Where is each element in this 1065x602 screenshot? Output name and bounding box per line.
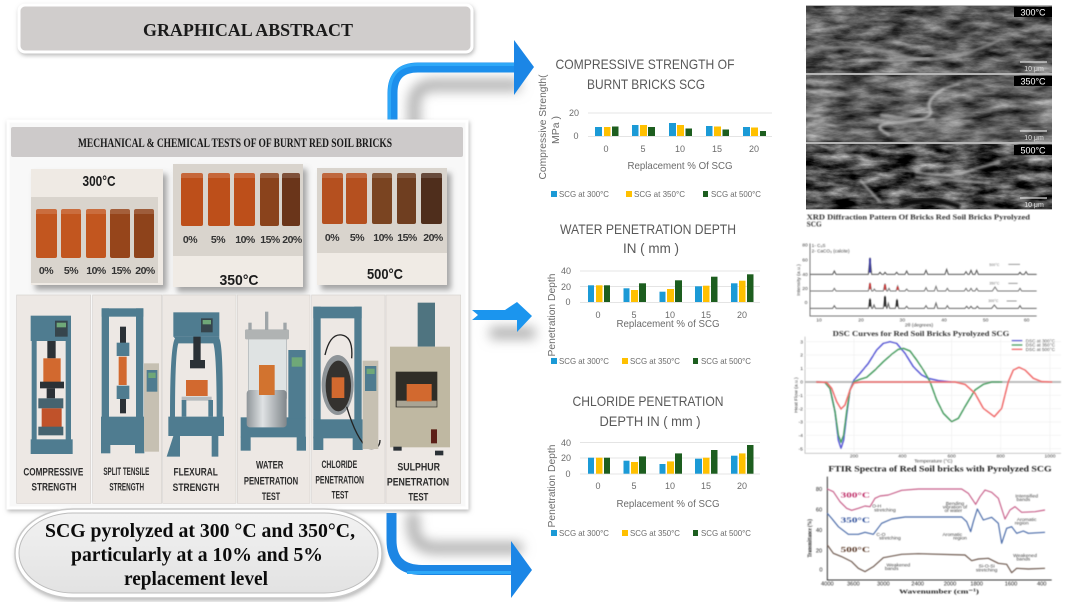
test: water penetration: PENETRATION (244, 476, 298, 488)
DSC legend (1012, 338, 1056, 352)
FTIR annotations: Weakened (886, 563, 910, 569)
chart: DSC curves (794, 329, 1061, 465)
test: water penetration (237, 295, 310, 503)
chart: chloride penetration depth: 10 (665, 481, 675, 491)
FTIR annotations: stretching (976, 568, 998, 574)
XRD traces (810, 258, 1037, 308)
DSC axis labels: 200 (850, 454, 858, 460)
DSC axis labels: 400 (898, 454, 907, 460)
FTIR axis labels: 400 (1037, 581, 1046, 587)
chart: chloride penetration depth: 40 (561, 438, 571, 448)
conclusion pill (15, 509, 382, 598)
DSC axis labels: 800 (997, 454, 1005, 460)
DSC heading: DSC Curves for Red Soil Bricks Pyrolyzed SCG (833, 329, 1009, 338)
legend: SCG at 350°C (630, 528, 680, 538)
XRD axis labels: 0 (805, 300, 808, 306)
FTIR annotations: bands (1017, 556, 1031, 562)
chart: water penetration depth: 10 (665, 310, 675, 320)
test: chloride penetration: PENETRATION (315, 475, 364, 487)
chart: compressive strength: 0 (603, 144, 609, 154)
XRD axis labels: 80 (802, 243, 808, 249)
legend: SCG at 300°C (559, 356, 609, 366)
SEM panel: 500 C (806, 144, 1052, 209)
FTIR axis labels: 3600 (847, 581, 860, 587)
test: chloride penetration: TEST (332, 490, 348, 502)
chart title: BURNT BRICKS SCG (587, 76, 705, 92)
test: split tensile strength: STRENGTH (109, 481, 144, 493)
chart title (556, 56, 734, 92)
test: compressive strength: STRENGTH (31, 481, 77, 493)
brick card: 350 C (173, 164, 303, 289)
FTIR annotations: Aromatic (1017, 517, 1037, 523)
arrow: to compressive strength chart (390, 40, 534, 124)
test: compressive strength (17, 295, 91, 503)
arrow shadows (413, 85, 535, 548)
brick card: 300 C: 0% (39, 265, 54, 277)
FTIR axis labels: 60 (816, 507, 822, 513)
chart title: COMPRESSIVE STRENGTH OF (556, 56, 734, 72)
test: split tensile strength: SPLIT TENSILE (103, 466, 149, 478)
brick card: 300 C: 10% (86, 265, 107, 277)
FTIR axis labels: Wavenumber (cm⁻¹) (899, 589, 979, 596)
legend: SCG at 500°C (701, 356, 751, 366)
chart: compressive strength: 0 (573, 131, 579, 141)
chart: chloride penetration depth: 0 (595, 481, 601, 491)
panel: mechanical and chemical tests (8, 121, 467, 508)
chart: water penetration depth: 0 (565, 297, 571, 307)
chart: compressive strength: Compressive Strength( (537, 74, 549, 180)
chart: water penetration depth (546, 221, 760, 366)
FTIR annotations: region (1015, 520, 1029, 526)
FTIR axis labels: Transmittance (%) (807, 519, 814, 557)
XRD axis labels: 1- C₃S (812, 243, 825, 248)
legend: SCG at 350°C (630, 356, 680, 366)
SEM panel: 500 C: 10 μm (1024, 202, 1044, 209)
brick card: 300 C: 300°C (82, 173, 116, 190)
DSC axis labels: -4 (798, 433, 803, 439)
FTIR axis labels: 2000 (944, 581, 956, 587)
bars (588, 445, 754, 474)
test: chloride penetration: CHLORIDE (321, 459, 357, 471)
XRD axis labels: 60 (1024, 317, 1030, 323)
XRD axis labels: 300°C (988, 299, 999, 303)
bars (588, 274, 754, 302)
brick card: 350 C: 15% (260, 234, 281, 246)
test: water penetration: WATER (256, 460, 283, 472)
bars (595, 123, 766, 136)
chart: FTIR spectra (807, 465, 1052, 596)
FTIR annotations: C-O (876, 532, 886, 538)
SEM panel: 300 C: 10 μm (1024, 66, 1044, 73)
FTIR annotations: region (953, 535, 967, 541)
brick card: 500 C: 10% (373, 232, 394, 244)
chart: compressive strength: 10 (675, 144, 685, 154)
FTIR annotations: Si-O-Si (979, 564, 995, 570)
chart: chloride penetration depth: Replacement % of SCG (616, 498, 720, 510)
XRD axis labels: Intensity (a.u.) (796, 264, 802, 296)
title banner: graphical abstract (19, 5, 472, 52)
XRD heading: SCG (807, 219, 822, 228)
DSC axis labels: -1 (798, 393, 803, 399)
chart: chloride penetration depth: 20 (561, 453, 571, 463)
brick card: 500 C (317, 168, 447, 285)
chart: compressive strength: MPa ) (550, 116, 562, 144)
chart: water penetration depth: 20 (737, 310, 747, 320)
brick card: 500 C: 20% (423, 232, 444, 244)
FTIR axis labels: 3000 (877, 581, 890, 587)
DSC axis labels: Heat Flow (a.u.) (794, 377, 800, 413)
chart: water penetration depth: Replacement % of SCG (616, 318, 720, 330)
SEM panel: 500 C: 500°C (1020, 146, 1046, 156)
XRD axis labels: 500°C (989, 263, 1000, 267)
FTIR series labels: 350°C (841, 517, 870, 525)
chart: compressive strength (537, 56, 772, 199)
title banner: graphical abstract: GRAPHICAL ABSTRACT (143, 20, 353, 40)
XRD axis labels: 10 (816, 317, 822, 323)
XRD axis labels: 350°C (989, 281, 1000, 285)
chart: water penetration depth: 15 (701, 310, 711, 320)
DSC legend: DSC at 300°C (1026, 338, 1056, 343)
FTIR series labels: 500°C (841, 546, 870, 554)
DSC axis labels: 3 (800, 339, 803, 345)
FTIR axis labels: 1600 (1005, 581, 1017, 587)
chart title: CHLORIDE PENETRATION (572, 393, 724, 409)
FTIR annotations: of water (944, 508, 963, 514)
brick card: 500 C: 500°C (367, 266, 403, 283)
XRD heading: XRD Diffraction Pattern Of Bricks Red Soil Bricks Pyrolyzed (807, 212, 1030, 221)
chart: water penetration depth: 20 (561, 282, 571, 292)
FTIR annotations: Bending (946, 501, 964, 507)
panel heading: MECHANICAL & CHEMICAL TESTS OF OF BURNT RED SOIL BRICKS (78, 136, 392, 150)
DSC traces (817, 342, 1052, 448)
XRD axis labels: 2θ (degrees) (905, 323, 933, 329)
FTIR axis labels: 1800 (970, 581, 983, 587)
chart title: DEPTH IN ( mm ) (600, 413, 700, 429)
FTIR axis labels: 4000 (821, 581, 834, 587)
XRD axis labels: 40 (941, 317, 947, 323)
XRD axis labels: 20 (802, 286, 808, 292)
brick card: 350 C: 20% (282, 234, 303, 246)
FTIR annotations: O-H (872, 504, 882, 510)
SEM panel: 350 C (806, 75, 1052, 142)
FTIR axis labels: 80 (816, 487, 822, 493)
brick card: 350 C: 5% (211, 234, 226, 246)
FTIR annotations: Aromatic (942, 532, 963, 538)
SEM panel: 300 C: 300°C (1020, 8, 1046, 18)
chart: XRD diffraction pattern (796, 212, 1037, 329)
brick card: 350 C: 350°C (220, 272, 259, 289)
XRD axis labels: 20 (858, 317, 864, 323)
FTIR annotations: vibration of (943, 504, 968, 510)
FTIR annotations: Weakened (1013, 553, 1037, 559)
arrow: to water penetration chart (472, 302, 532, 332)
conclusion pill: SCG pyrolyzed at 300 °C and 350°C, (45, 520, 355, 542)
FTIR annotations: bands (1017, 497, 1031, 503)
conclusion pill: particularly at a 10% and 5% (71, 544, 323, 566)
FTIR axis labels (807, 487, 1046, 596)
legend (551, 528, 751, 538)
test: flexural strength (163, 295, 236, 503)
DSC axis labels: 2 (800, 353, 803, 359)
FTIR axis labels: 40 (816, 528, 822, 534)
test: water penetration: TEST (262, 491, 280, 503)
legend: SCG at 300°C (559, 189, 609, 199)
test: flexural strength: FLEXURAL (173, 467, 218, 479)
chart title (572, 393, 724, 429)
DSC axis labels: Temperature (°C) (914, 459, 953, 465)
chart: water penetration depth: 0 (595, 310, 601, 320)
conclusion pill: replacement level (124, 568, 268, 590)
XRD axis labels (796, 243, 1030, 329)
test equipment row (17, 295, 461, 503)
FTIR axis labels: 20 (816, 549, 822, 555)
test: chloride penetration (312, 295, 385, 503)
DSC legend: DSC at 350°C (1026, 343, 1056, 348)
chart: compressive strength: 20 (569, 108, 579, 118)
test: flexural strength: STRENGTH (173, 482, 219, 494)
FTIR series labels: 300°C (841, 492, 870, 500)
brick card: 300 C (31, 169, 163, 285)
DSC axis labels: 1000 (1044, 454, 1056, 460)
brick card: 300 C: 15% (111, 265, 132, 277)
panel heading (11, 127, 463, 157)
FTIR annotations (872, 494, 1038, 574)
FTIR series labels (841, 492, 870, 554)
chart: water penetration depth: 5 (631, 310, 637, 320)
test: compressive strength: COMPRESSIVE (23, 467, 83, 479)
legend: SCG at 300°C (559, 528, 609, 538)
DSC axis labels: 1 (800, 366, 803, 372)
test: split tensile strength (93, 295, 162, 503)
FTIR annotations: stretching (874, 508, 896, 514)
brick card: 300 C: 5% (64, 265, 79, 277)
legend: SCG at 500°C (701, 528, 751, 538)
brick card: 500 C: 15% (397, 232, 418, 244)
chart: chloride penetration depth: 5 (631, 481, 637, 491)
chart: chloride penetration depth: 0 (565, 469, 571, 479)
chart: compressive strength: Replacement % Of SCG (628, 160, 732, 172)
chart: water penetration depth: Penetration Depth (546, 273, 558, 356)
FTIR axis labels: 2400 (911, 581, 924, 587)
chart title (560, 221, 736, 256)
brick card: 350 C: 10% (235, 234, 256, 246)
DSC axis labels: -3 (798, 420, 803, 426)
test: sulphur penetration: SULPHUR (397, 461, 440, 473)
XRD axis labels: 2- CaCO₃ (calcite) (812, 248, 850, 253)
chart: chloride penetration depth: 15 (701, 481, 711, 491)
FTIR annotations: stretching (879, 535, 901, 541)
chart: compressive strength: 20 (749, 144, 759, 154)
FTIR traces (827, 489, 1045, 573)
DSC axis labels: 0 (800, 380, 803, 386)
XRD axis labels: 60 (802, 258, 808, 264)
DSC axis labels: -2 (798, 406, 803, 412)
test: sulphur penetration: PENETRATION (387, 476, 449, 488)
legend (551, 189, 761, 199)
arrow: to chloride penetration chart (392, 513, 532, 598)
chart: chloride penetration depth: Penetration Depth (546, 444, 558, 528)
SEM micrographs (806, 5, 1052, 210)
chart title: IN ( mm ) (623, 240, 679, 256)
XRD heading (807, 212, 1030, 228)
chart title: WATER PENETRATION DEPTH (560, 221, 736, 237)
DSC axis labels (794, 339, 1056, 465)
brick card: 350 C: 0% (183, 234, 198, 246)
DSC axis labels: 600 (948, 454, 956, 460)
SEM panel: 300 C (806, 6, 1052, 73)
brick card: 500 C: 0% (325, 232, 340, 244)
FTIR annotations: Intensified (1015, 494, 1038, 500)
FTIR heading: FTIR Spectra of Red Soil bricks with Pyrolyzed SCG (828, 465, 1052, 474)
DSC axis labels: -5 (798, 446, 803, 452)
XRD axis labels: 50 (983, 317, 989, 323)
brick card: 300 C: 20% (135, 265, 156, 277)
legend: SCG at 500°C (711, 189, 761, 199)
XRD axis labels: 40 (802, 272, 808, 278)
XRD axis labels: 30 (900, 317, 905, 323)
SEM panel: 350 C: 350°C (1020, 76, 1046, 86)
chart: chloride penetration depth: 20 (737, 481, 747, 491)
chart: water penetration depth: 40 (561, 266, 571, 276)
legend (551, 356, 751, 366)
SEM panel: 350 C: 10 μm (1024, 135, 1044, 142)
DSC legend: DSC at 500°C (1026, 347, 1056, 352)
test: sulphur penetration: TEST (408, 491, 429, 503)
chart: chloride penetration depth (546, 393, 760, 538)
test: sulphur penetration (386, 295, 461, 503)
FTIR axis labels: 0 (819, 568, 823, 574)
brick card: 500 C: 5% (350, 232, 365, 244)
FTIR annotations: bands (885, 566, 899, 572)
legend: SCG at 350°C (634, 189, 685, 199)
chart: compressive strength: 5 (640, 144, 646, 154)
chart: compressive strength: 15 (712, 144, 722, 154)
